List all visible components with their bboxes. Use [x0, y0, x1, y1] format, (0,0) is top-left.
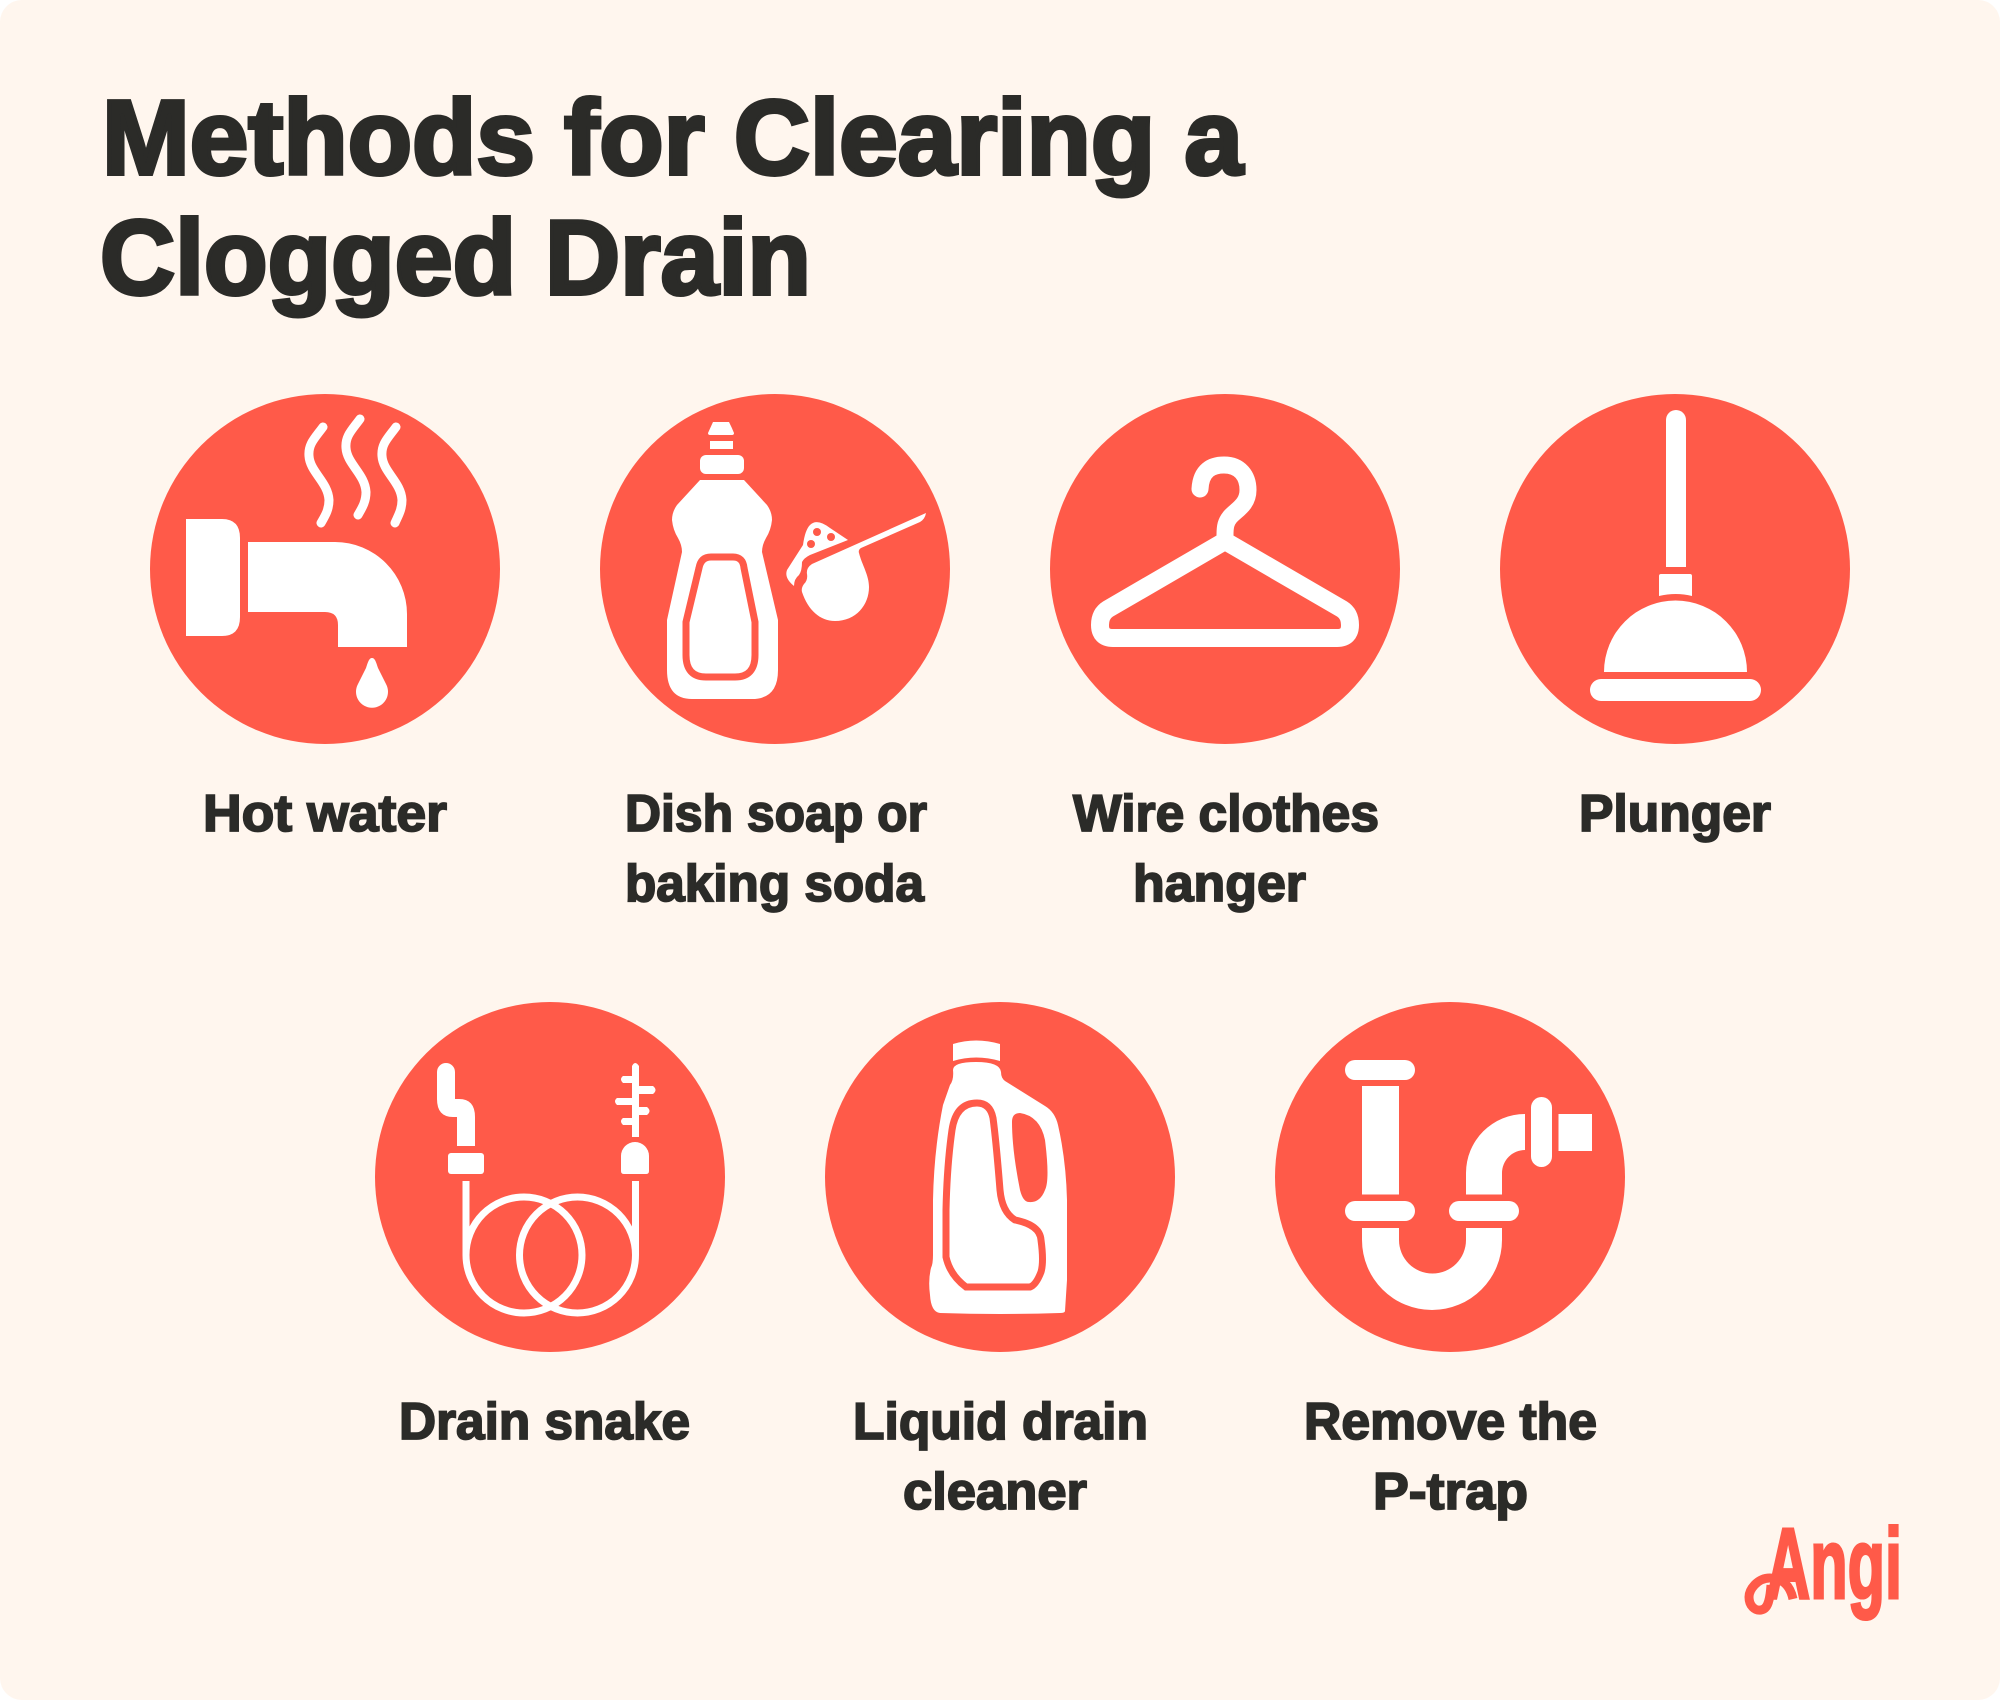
panel: remove the p-trap: [1275, 1002, 1625, 1521]
label: P-trap: [1373, 1463, 1528, 1521]
logo: Angi: Angi: [1766, 1508, 1902, 1620]
panel: hot water: [150, 394, 500, 843]
logo: Angi: [1749, 1508, 1902, 1620]
icon: cleaner jug: [825, 1002, 1175, 1352]
icon: plunger: [1500, 394, 1850, 744]
label: Wire clothes: [1073, 785, 1379, 843]
icon: hanger: [1050, 394, 1400, 744]
icon: drain snake: [375, 1002, 725, 1352]
label: [1073, 785, 1379, 913]
panel: liquid drain cleaner: [825, 1002, 1175, 1521]
label: Dish soap or: [625, 785, 927, 843]
panel: wire clothes hanger: [1050, 394, 1400, 913]
label: [1304, 1393, 1597, 1521]
label: [853, 1393, 1148, 1521]
label: Plunger: [1579, 785, 1771, 843]
label: baking soda: [625, 855, 925, 913]
title: [100, 79, 1244, 317]
label: hanger: [1133, 855, 1306, 913]
panel: drain snake: [375, 1002, 725, 1451]
label: [625, 785, 927, 913]
label: cleaner: [903, 1463, 1087, 1521]
title: Methods for Clearing a: [102, 79, 1244, 197]
icon: soap bottle and scoop: [600, 394, 950, 744]
label: Remove the: [1304, 1393, 1597, 1451]
panel: plunger: [1500, 394, 1850, 843]
panel: dish soap or baking soda: [600, 394, 950, 913]
label: Liquid drain: [853, 1393, 1148, 1451]
icon: faucet with steam: [150, 394, 500, 744]
icon: p-trap pipe: [1275, 1002, 1625, 1352]
label: Hot water: [203, 785, 447, 843]
title: Clogged Drain: [100, 199, 811, 317]
label: Drain snake: [399, 1393, 690, 1451]
